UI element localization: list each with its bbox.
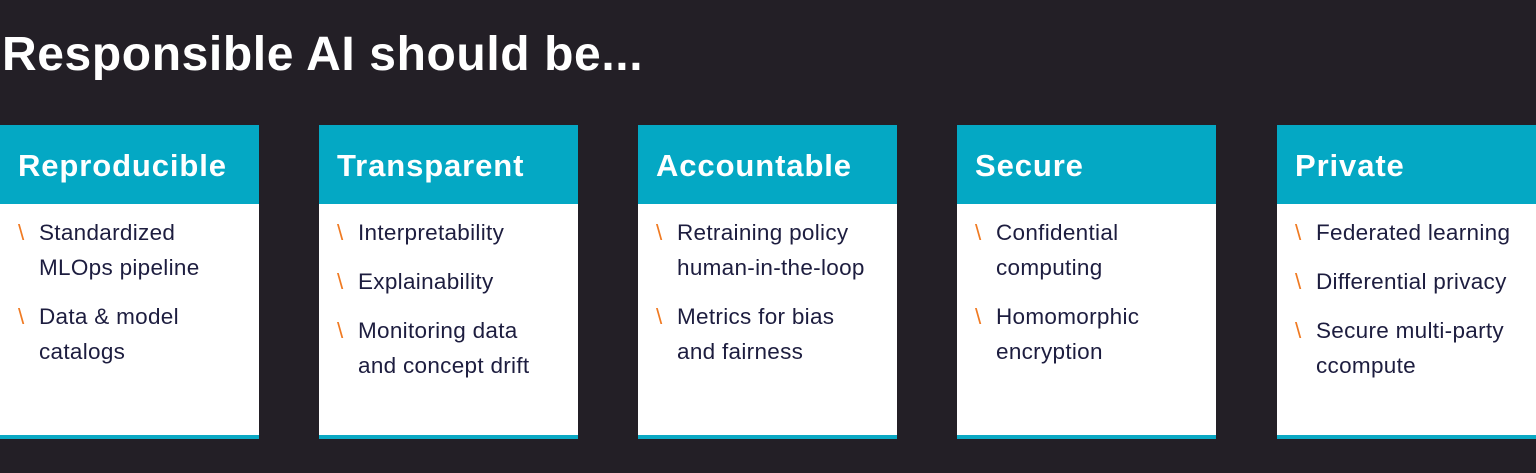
list: secure: \ <box>975 304 982 329</box>
list: transparent: Explainability <box>358 269 494 294</box>
list: reproducible: catalogs <box>39 339 125 364</box>
list: reproducible: Standardized <box>39 220 175 245</box>
list: reproducible: Data & model <box>39 304 179 329</box>
list: private <box>1295 220 1510 378</box>
list: transparent: Interpretability <box>358 220 504 245</box>
heading: accountable: Accountable <box>656 148 852 183</box>
heading: accountable <box>638 125 897 204</box>
list: accountable: human-in-the-loop <box>677 255 865 280</box>
list: accountable: \ <box>656 220 663 245</box>
list: transparent: \ <box>337 220 344 245</box>
list: secure: computing <box>996 255 1103 280</box>
heading: transparent: Transparent <box>337 148 524 183</box>
list: private: ccompute <box>1316 353 1416 378</box>
list: private: \ <box>1295 220 1302 245</box>
list: secure: Confidential <box>996 220 1118 245</box>
heading: secure: Secure <box>975 148 1084 183</box>
list: transparent <box>337 220 529 378</box>
heading: secure <box>957 125 1216 204</box>
list: reproducible: \ <box>18 220 25 245</box>
heading: private <box>1277 125 1536 204</box>
list: accountable: and fairness <box>677 339 803 364</box>
list: transparent: and concept drift <box>358 353 529 378</box>
list: secure <box>975 220 1139 364</box>
heading: reproducible <box>0 125 259 204</box>
heading: transparent <box>319 125 578 204</box>
list: secure: encryption <box>996 339 1103 364</box>
list: transparent: \ <box>337 269 344 294</box>
list: private: \ <box>1295 318 1302 343</box>
panel: transparent <box>319 125 578 439</box>
list: reproducible <box>18 220 200 364</box>
list: reproducible: \ <box>18 304 25 329</box>
heading: private: Private <box>1295 148 1405 183</box>
list: accountable <box>656 220 865 364</box>
panel: secure <box>957 125 1216 439</box>
list: private: Differential privacy <box>1316 269 1507 294</box>
list: transparent: \ <box>337 318 344 343</box>
list: private: Secure multi-party <box>1316 318 1504 343</box>
list: accountable: Retraining policy <box>677 220 848 245</box>
list: reproducible: MLOps pipeline <box>39 255 200 280</box>
panel: accountable <box>638 125 897 439</box>
list: accountable: \ <box>656 304 663 329</box>
list: accountable: Metrics for bias <box>677 304 834 329</box>
heading: reproducible: Reproducible <box>18 148 227 183</box>
list: private: Federated learning <box>1316 220 1510 245</box>
list: secure: Homomorphic <box>996 304 1139 329</box>
list: private: \ <box>1295 269 1302 294</box>
title: Responsible AI should be... <box>2 28 643 81</box>
panel: private <box>1277 125 1536 439</box>
list: secure: \ <box>975 220 982 245</box>
panel: reproducible <box>0 125 259 439</box>
list: transparent: Monitoring data <box>358 318 518 343</box>
